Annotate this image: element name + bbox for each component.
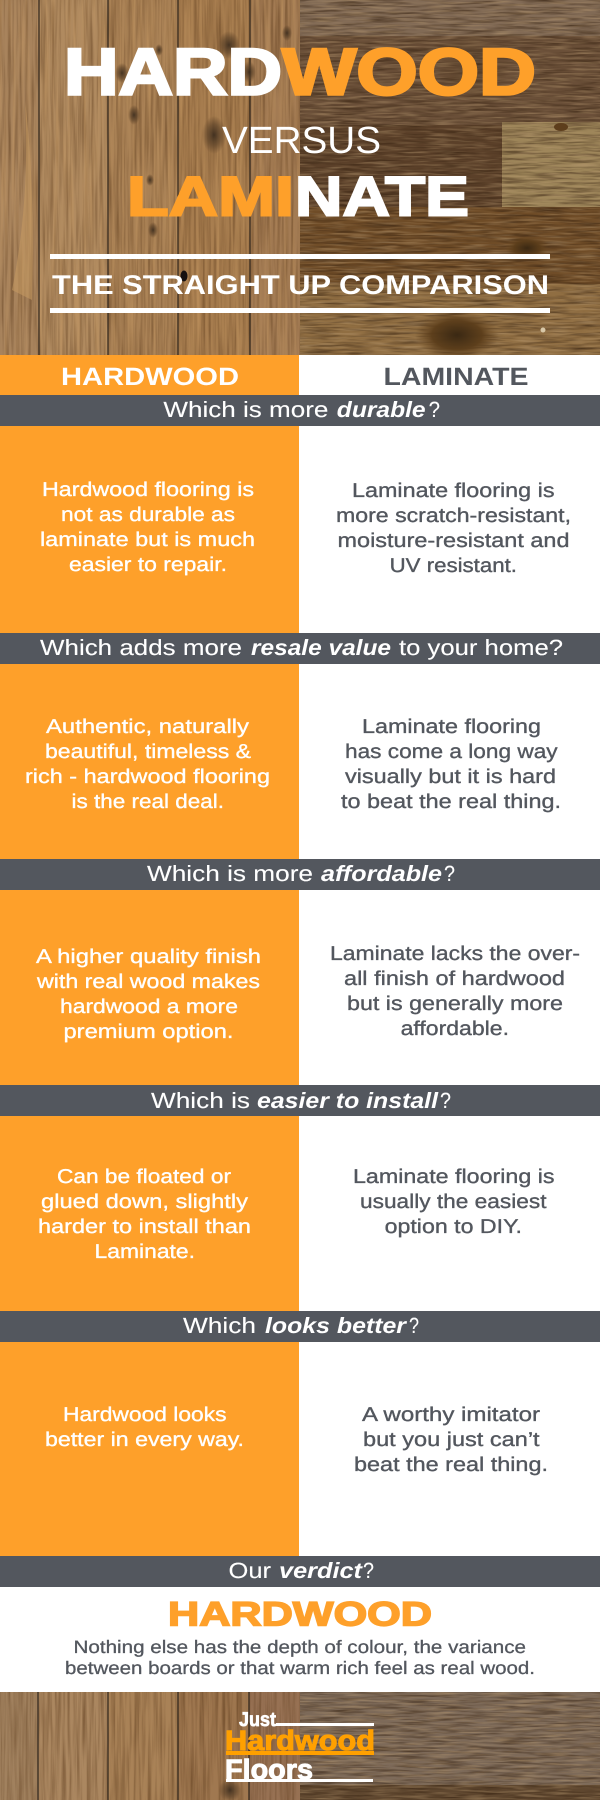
title: laminate: LAMI xyxy=(127,164,294,228)
hardwood affordability text xyxy=(36,946,261,1043)
hardwood looks text: better in every way. xyxy=(45,1429,244,1451)
laminate looks text: beat the real thing. xyxy=(354,1454,548,1476)
laminate resale text: visually but it is hard xyxy=(345,766,556,788)
question 2 bar: to your home? xyxy=(399,635,563,660)
laminate affordability text: all finish of hardwood xyxy=(344,968,565,990)
question 4 bar: easier to install xyxy=(257,1088,439,1113)
logo: just hardwood floors: Hardwood xyxy=(225,1725,375,1756)
laminate durability text: Laminate flooring is xyxy=(352,480,554,502)
wood texture: laminate boards xyxy=(300,0,600,359)
header: wood background with title xyxy=(0,0,600,359)
question 3 bar xyxy=(0,859,600,890)
question 5 bar: looks better xyxy=(265,1313,408,1338)
question 4 bar xyxy=(0,1085,600,1116)
title: hardwood xyxy=(64,35,536,109)
question 1 bar: Which is more xyxy=(163,397,328,422)
column heading: hardwood: HARDWOOD xyxy=(61,363,239,391)
hardwood resale text: is the real deal. xyxy=(72,791,224,813)
title: hardwood: WOOD xyxy=(282,35,536,109)
hardwood resale text: beautiful, timeless & xyxy=(45,741,252,763)
question 3 bar: ? xyxy=(444,861,455,886)
hardwood affordability text: A higher quality finish xyxy=(36,946,261,968)
laminate looks text: A worthy imitator xyxy=(362,1404,540,1426)
subtitle with rules: THE STRAIGHT UP COMPARISON xyxy=(52,270,549,300)
wood texture: hardwood planks xyxy=(0,0,300,355)
verdict heading: HARDWOOD xyxy=(168,1596,432,1634)
hardwood looks text: Hardwood looks xyxy=(63,1404,226,1426)
question 1 bar: ? xyxy=(429,397,440,422)
verdict question bar: ? xyxy=(363,1558,374,1583)
verdict text xyxy=(65,1637,535,1678)
laminate resale text: has come a long way xyxy=(345,741,558,763)
hardwood durability text: Hardwood flooring is xyxy=(42,479,254,501)
laminate looks text: but you just can’t xyxy=(363,1429,540,1451)
laminate affordability text xyxy=(330,943,580,1040)
laminate affordability text: Laminate lacks the over- xyxy=(330,943,580,965)
laminate resale text: Laminate flooring xyxy=(362,716,541,738)
hardwood affordability text: premium option. xyxy=(64,1021,234,1043)
laminate install text xyxy=(353,1166,554,1238)
question 2 bar: resale value xyxy=(251,635,391,660)
question 4 bar: Which is xyxy=(151,1088,250,1113)
verdict question bar: verdict xyxy=(279,1558,364,1583)
logo: just hardwood floors: Just xyxy=(239,1709,276,1731)
column heading: laminate: LAMINATE xyxy=(384,363,528,391)
subtitle with rules xyxy=(50,254,550,313)
verdict panel xyxy=(0,1587,600,1692)
hardwood install text: glued down, slightly xyxy=(41,1191,248,1213)
laminate durability text xyxy=(336,480,571,577)
verdict text: between boards or that warm rich feel as real wood. xyxy=(65,1658,535,1678)
question 2 bar: Which adds more xyxy=(40,635,242,660)
hardwood resale text: rich - hardwood flooring xyxy=(25,766,270,788)
verdict question bar xyxy=(0,1556,600,1587)
hardwood install text: Can be floated or xyxy=(57,1166,231,1188)
hardwood resale text: Authentic, naturally xyxy=(46,716,249,738)
hardwood install text xyxy=(38,1166,251,1263)
question 1 bar: durable xyxy=(337,397,426,422)
hardwood durability text xyxy=(40,479,255,576)
hardwood durability text: laminate but is much xyxy=(40,529,255,551)
footer: wood background xyxy=(0,1692,600,1800)
laminate durability text: UV resistant. xyxy=(390,555,517,577)
laminate install text: option to DIY. xyxy=(385,1216,522,1238)
comparison columns background xyxy=(0,355,600,1556)
laminate affordability text: affordable. xyxy=(401,1018,509,1040)
laminate durability text: more scratch-resistant, xyxy=(336,505,571,527)
verdict text: Nothing else has the depth of colour, the variance xyxy=(74,1637,526,1657)
title: versus: VERSUS xyxy=(222,120,381,162)
laminate durability text: moisture-resistant and xyxy=(338,530,570,552)
logo: just hardwood floors: Floors xyxy=(225,1754,313,1785)
hardwood affordability text: hardwood a more xyxy=(60,996,238,1018)
title: laminate: NATE xyxy=(295,164,469,228)
hardwood looks text xyxy=(45,1404,244,1451)
question 5 bar xyxy=(0,1311,600,1342)
question 4 bar: ? xyxy=(440,1088,451,1113)
laminate install text: usually the easiest xyxy=(360,1191,547,1213)
verdict question bar: Our xyxy=(228,1558,271,1583)
laminate resale text xyxy=(341,716,561,813)
laminate install text: Laminate flooring is xyxy=(353,1166,554,1188)
title: laminate xyxy=(127,164,469,228)
question 5 bar: Which xyxy=(183,1313,256,1338)
question 5 bar: ? xyxy=(409,1313,419,1338)
question 1 bar xyxy=(0,395,600,426)
hardwood install text: harder to install than xyxy=(38,1216,251,1238)
title: hardwood: HARD xyxy=(64,35,282,109)
question 3 bar: affordable xyxy=(321,861,442,886)
logo: just hardwood floors xyxy=(225,1709,375,1785)
hardwood durability text: easier to repair. xyxy=(69,554,227,576)
laminate resale text: to beat the real thing. xyxy=(341,791,561,813)
hardwood resale text xyxy=(25,716,270,813)
laminate looks text xyxy=(354,1404,548,1476)
question 3 bar: Which is more xyxy=(147,861,313,886)
hardwood install text: Laminate. xyxy=(94,1241,195,1263)
laminate affordability text: but is generally more xyxy=(347,993,563,1015)
hardwood durability text: not as durable as xyxy=(61,504,235,526)
hardwood affordability text: with real wood makes xyxy=(36,971,260,993)
question 2 bar xyxy=(0,633,600,664)
